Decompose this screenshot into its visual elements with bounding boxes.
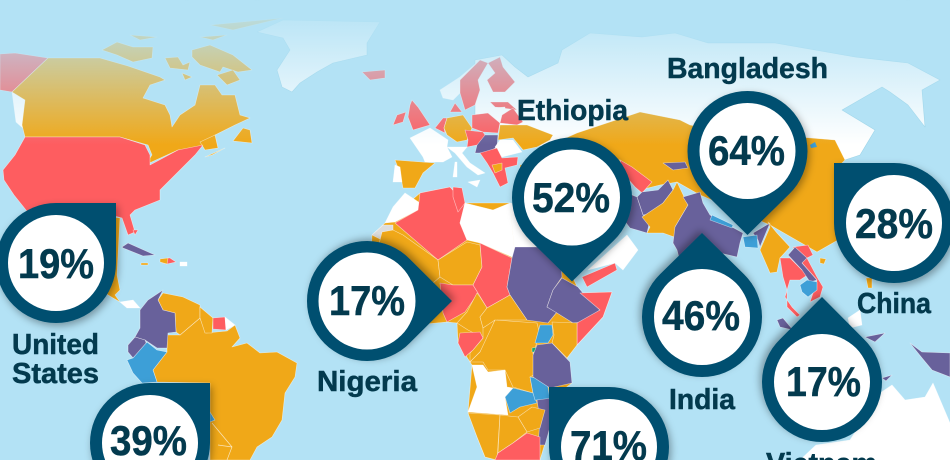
- Alaska: [0, 53, 48, 92]
- Venezuela and Guyana: [158, 293, 200, 335]
- Zambia: [505, 388, 537, 413]
- Scandinavia: [440, 60, 480, 100]
- Indonesia and Papua: [848, 310, 862, 328]
- Laos: [788, 247, 817, 282]
- Libya: [460, 203, 515, 257]
- Western Europe: [410, 128, 452, 162]
- pin: China 28%: 28%: [855, 200, 933, 247]
- pin: Ethiopia 52%: 52%: [532, 174, 610, 221]
- Gabon: [458, 332, 483, 357]
- pin: United States 19%: 19%: [18, 240, 94, 287]
- Bangladesh: [743, 235, 758, 248]
- label: Bangladesh: Bangladesh: [667, 53, 828, 85]
- Congo: [470, 320, 495, 362]
- Mexico and Central America: [60, 210, 120, 302]
- Caribbean: [122, 243, 155, 256]
- pin: China 28%: [834, 163, 950, 283]
- Hainan and Philippines: [820, 258, 826, 264]
- Vietnam: [793, 245, 823, 302]
- Iceland: [362, 70, 385, 80]
- Peru: [127, 342, 167, 383]
- South Africa: [495, 433, 540, 460]
- Sudan: [507, 247, 562, 323]
- Uganda: [535, 325, 553, 343]
- Russia south, Kazakhstan and China: [550, 112, 845, 252]
- United Kingdom: [408, 100, 430, 130]
- Africa base landmass: [370, 187, 612, 460]
- label: United States: [12, 329, 99, 390]
- Ethiopia: [547, 278, 600, 323]
- Somalia: [577, 292, 612, 345]
- pin: Vietnam 17%: [762, 297, 882, 442]
- pin: India 46%: [642, 233, 762, 377]
- pin: Ethiopia 52%: [512, 137, 632, 282]
- Cameroon: [457, 293, 488, 340]
- pin: Bangladesh 64%: 64%: [708, 127, 785, 174]
- Namibia: [468, 413, 500, 460]
- cropped title fragments: [184, 0, 919, 2]
- label: India: India: [669, 384, 736, 416]
- Mauritania and Mali: [370, 230, 440, 283]
- Morocco: [385, 193, 420, 223]
- Iran north: [620, 160, 652, 193]
- pin: Bangladesh 64%: [688, 91, 808, 235]
- Ireland: [393, 112, 406, 125]
- Chad: [473, 243, 512, 308]
- Arctic islands: [102, 42, 153, 62]
- Angola: [468, 365, 513, 415]
- label: China: China: [857, 288, 932, 320]
- Algeria: [395, 187, 467, 260]
- Australia: [800, 383, 950, 460]
- pin: India 46%: 46%: [662, 292, 740, 339]
- Colombia: [135, 290, 176, 348]
- North-east India: [753, 223, 770, 247]
- Egypt: [510, 203, 540, 257]
- Cambodia: [800, 280, 817, 297]
- Brazil: [153, 318, 297, 460]
- Russia and northern Eurasia: [475, 33, 940, 165]
- Greenland: [257, 20, 380, 92]
- DR Congo: [470, 320, 540, 393]
- pin: Nigeria 17%: [307, 241, 452, 361]
- pin: Vietnam 17%: 17%: [786, 358, 861, 405]
- Zimbabwe: [518, 407, 545, 432]
- Kenya: [552, 322, 577, 358]
- pin: Nigeria 17%: 17%: [329, 277, 405, 324]
- label: Ethiopia: Ethiopia: [517, 95, 629, 127]
- Mozambique: [537, 398, 552, 445]
- label: United States: United: [12, 329, 99, 361]
- label: Nigeria: Nigeria: [317, 366, 418, 398]
- Tanzania: [533, 343, 572, 388]
- Rwanda: [532, 347, 538, 352]
- Atlantic Canada: [233, 128, 252, 143]
- Kyrgyzstan: [663, 162, 688, 170]
- Suriname and French Guiana: [213, 317, 226, 330]
- Central African Republic: [480, 295, 527, 328]
- Ecuador: [128, 337, 147, 358]
- Alaska panhandle: [12, 92, 25, 130]
- label: United States: States: [12, 358, 99, 390]
- Botswana: [498, 415, 527, 453]
- Malawi: [530, 377, 550, 400]
- Iran south: [620, 190, 650, 233]
- Arabia and Oman: [588, 235, 638, 270]
- Myanmar: [760, 222, 790, 273]
- India: [673, 192, 743, 300]
- inland seas: [810, 142, 817, 148]
- Canada: [12, 58, 250, 165]
- pin: United States 19%: [0, 203, 116, 323]
- Yemen: [582, 263, 617, 287]
- Baltics: [490, 102, 517, 110]
- Niger: [438, 242, 482, 285]
- Burundi: [533, 353, 538, 360]
- Tunisia: [453, 187, 465, 212]
- Pakistan: [642, 182, 688, 238]
- Turkey and Middle East: [520, 160, 625, 200]
- Afghanistan: [637, 180, 673, 215]
- polar fade overlay: [0, 0, 950, 145]
- South American border lines: [212, 423, 232, 460]
- Western Sahara: [372, 225, 393, 240]
- Nepal: [710, 215, 733, 228]
- United States: [3, 137, 203, 235]
- pin: South America 39%: [90, 383, 210, 460]
- Thailand: [780, 258, 812, 317]
- Eastern Europe: [472, 113, 500, 133]
- Nigeria: [440, 283, 478, 322]
- pin: Tanzania 71%: [549, 387, 669, 460]
